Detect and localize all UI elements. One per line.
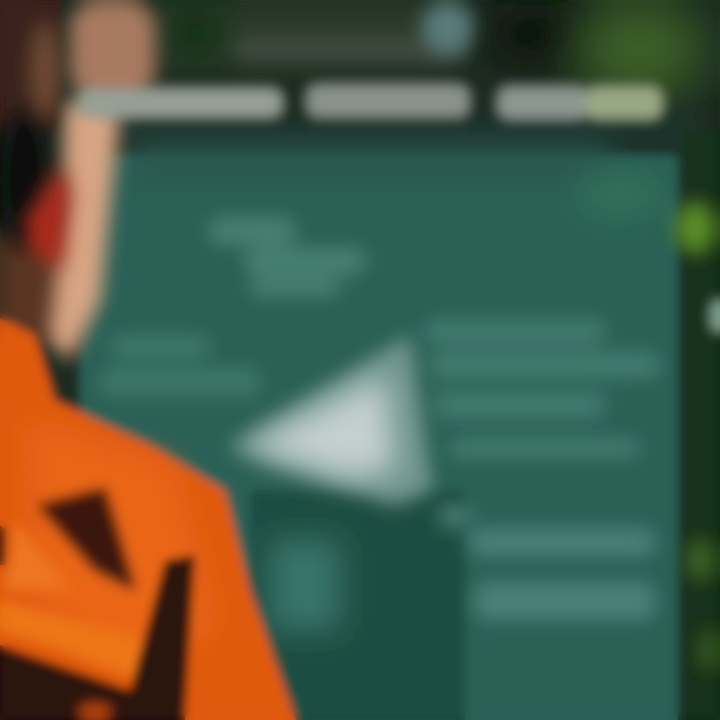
text block: upper left blurred lines [210, 218, 365, 296]
panel: dark lower section [250, 490, 465, 720]
text block: lower centre blurred lines [270, 540, 340, 630]
person: head and hair [0, 0, 155, 360]
person: orange shirt [0, 318, 296, 720]
heading: blurred title [78, 84, 663, 120]
icon: white pointer triangle [228, 335, 432, 505]
text block: lower right blurred lines [440, 505, 655, 620]
foliage: right edge [675, 130, 720, 720]
text block: left blurred lines [100, 335, 260, 396]
panel: teal board [80, 145, 678, 720]
text block: right blurred lines [425, 320, 660, 458]
